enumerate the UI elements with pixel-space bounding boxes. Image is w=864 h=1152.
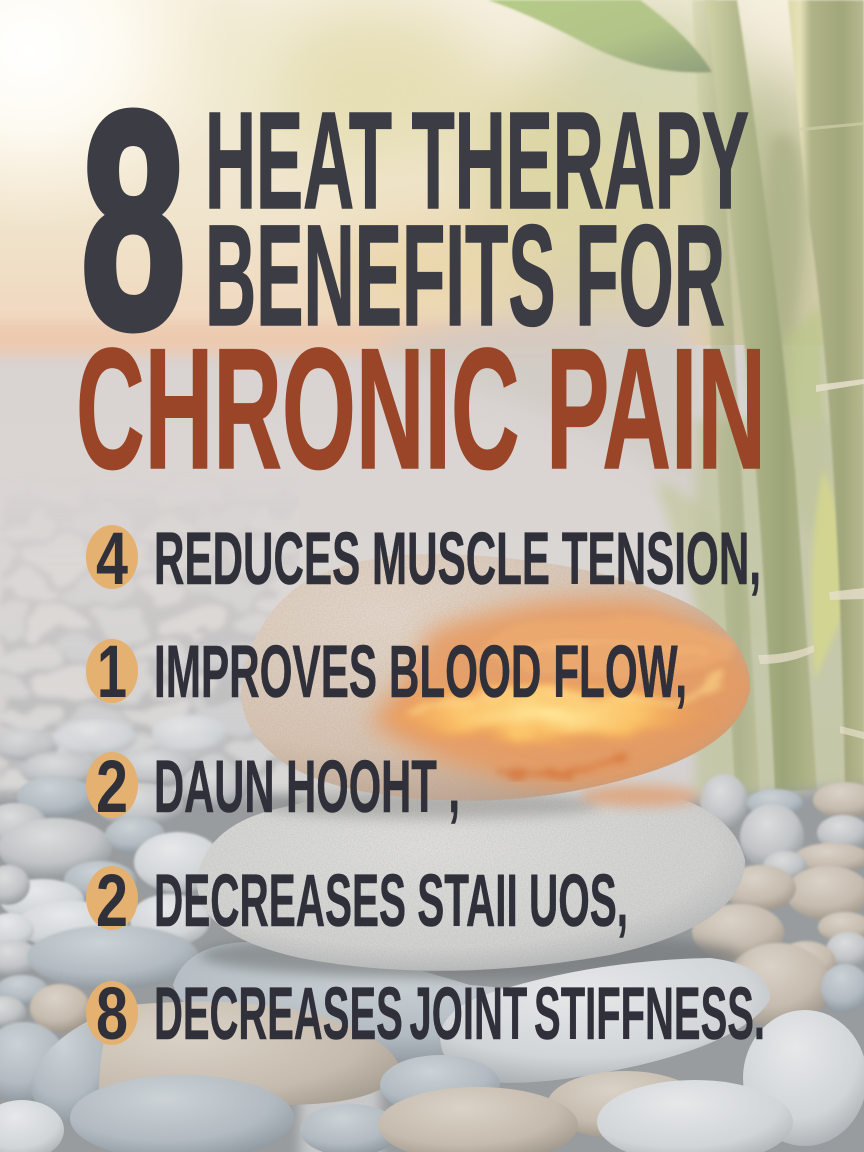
- bamboo stalk: right: [788, 0, 864, 785]
- item 5: 8: [96, 972, 128, 1055]
- stone: lower blue-grey: [173, 942, 700, 1065]
- item 4: [86, 859, 628, 942]
- item 3: 2: [96, 745, 128, 828]
- foreground stones: [0, 958, 864, 1152]
- title: [76, 49, 766, 505]
- item 3: [86, 745, 460, 828]
- benefits list: [86, 517, 765, 1055]
- stone: lower right pale: [440, 958, 770, 1083]
- bamboo stalks and foliage: [488, 0, 864, 800]
- item 4: 2: [96, 859, 128, 942]
- item 2: 1: [97, 630, 127, 713]
- stone: top, heated and glowing: [241, 554, 760, 801]
- bamboo leaf: [488, 0, 712, 72]
- item 2: [86, 630, 687, 713]
- bamboo stalk: middle: [705, 0, 817, 792]
- glow: outer orange: [368, 598, 760, 789]
- big number 8: 8: [81, 49, 185, 391]
- distant cobbles: [0, 542, 296, 794]
- stone: bottom pebbles: [380, 1055, 500, 1115]
- stone: left long tan: [30, 1002, 400, 1125]
- bamboo stalk: far: [692, 0, 760, 800]
- item 3: DAUN HOOHT ,: [154, 745, 460, 828]
- glow: bright core: [396, 683, 680, 746]
- foreground pebble bed: [0, 715, 864, 1152]
- stone: middle grey: [197, 781, 745, 979]
- item 1: 4: [96, 517, 128, 600]
